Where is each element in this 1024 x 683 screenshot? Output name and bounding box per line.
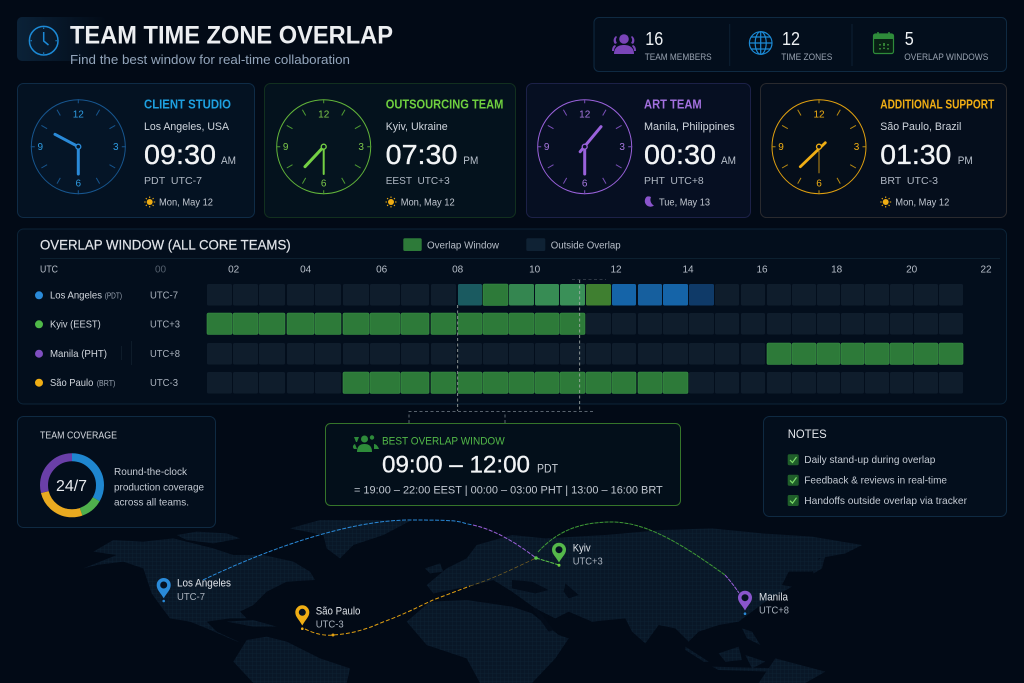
icon: clock: [29, 26, 58, 55]
route: Los Angeles arc: [203, 520, 536, 580]
time axis: 14: [682, 264, 694, 275]
panel: art team clock: PHT UTC+8: [644, 175, 704, 187]
panel: outsourcing team clock: PM: [463, 155, 478, 167]
best window heading: BEST OVERLAP WINDOW: [382, 435, 505, 447]
row label: Los Angeles: [35, 290, 178, 302]
donut chart: 24/7: [56, 478, 87, 495]
icon: moon: [645, 196, 654, 207]
row label: Los Angeles: Los Angeles: [50, 290, 102, 302]
row label: Manila: UTC+8: [150, 348, 180, 360]
panel: client studio clock: AM: [221, 155, 236, 167]
row label: Manila: Manila (PHT): [50, 348, 107, 360]
clock: Kyiv: 6: [321, 179, 327, 190]
note: reviews: Feedback & reviews in real-time: [804, 475, 947, 487]
panel: art team clock: AM: [721, 155, 736, 167]
header: [17, 17, 393, 67]
stat: team members: 16: [645, 29, 663, 49]
world map: [83, 520, 862, 683]
time axis: 06: [376, 264, 388, 275]
icon: sun: [386, 196, 396, 208]
clock: Los Angeles: 3: [113, 142, 119, 153]
subtitle: Find the best window for real-time collaboration: [70, 52, 350, 67]
panel: notes: [764, 416, 1006, 516]
legend: outside overlap: [526, 238, 621, 251]
coverage description: production coverage: [114, 481, 204, 493]
timeline row: Kyiv: [207, 313, 963, 334]
pin: São Paulo: [295, 605, 360, 631]
coverage heading: TEAM COVERAGE: [40, 430, 117, 441]
clock: Los Angeles: [31, 99, 126, 194]
panel: outsourcing team clock: 07:30: [386, 139, 457, 170]
clock: São Paulo: 3: [854, 142, 860, 153]
pin: Los Angeles: Los Angeles: [177, 578, 231, 590]
panel: outsourcing team clock: OUTSOURCING TEAM: [386, 98, 503, 112]
time axis: 16: [756, 264, 768, 275]
panel: art team clock: 00:30: [644, 139, 716, 170]
row label: São Paulo: UTC-3: [150, 377, 178, 389]
time axis: 00: [155, 264, 166, 275]
route: Kyiv to Manila arc: [534, 522, 739, 593]
icon: sun: [880, 196, 891, 208]
panel: art team clock: Tue, May 13: [659, 198, 710, 209]
time axis: 12: [610, 264, 622, 275]
clock: Manila: 6: [582, 179, 588, 190]
stat: time zones: TIME ZONES: [781, 52, 832, 63]
legend: overlap window: Overlap Window: [427, 240, 500, 251]
clock: Los Angeles: 9: [38, 142, 44, 153]
panel: additional support clock: PM: [958, 155, 973, 167]
panel: client studio clock: 09:30: [144, 139, 216, 170]
panel: outsourcing team clock: Kyiv, Ukraine: [386, 121, 448, 133]
pin: São Paulo: São Paulo: [316, 605, 360, 617]
row label: São Paulo: (BRT): [97, 379, 116, 388]
panel: overlap window chart: [18, 229, 1006, 404]
clock: Kyiv: 12: [318, 110, 330, 121]
pin: Los Angeles: UTC-7: [177, 591, 205, 603]
pin: Los Angeles: [157, 578, 231, 603]
stat: time zones: [749, 29, 832, 63]
stat: team members: [612, 29, 712, 63]
best window time: 09:00 – 12:00: [382, 452, 530, 479]
timeline row: São Paulo: [207, 372, 963, 394]
panel: summary stats: [594, 18, 1006, 72]
map: eastern hemisphere land: [512, 528, 862, 683]
panel: additional support clock: BRT UTC-3: [880, 175, 938, 187]
best window conversions: = 19:00 – 22:00 EEST | 00:00 – 03:00 PHT | 13:00 – 16:00 BRT: [354, 484, 663, 496]
row label: Kyiv: UTC+3: [150, 319, 180, 331]
note: stand-up: Daily stand-up during overlap: [804, 454, 935, 466]
clock: Manila: 3: [619, 142, 625, 153]
clock: São Paulo: 9: [778, 142, 784, 153]
pin: Manila: Manila: [759, 591, 789, 603]
time axis: 22: [980, 264, 992, 275]
panel: additional support clock: [760, 84, 1006, 218]
stat: overlap windows: 5: [905, 29, 914, 49]
title: TEAM TIME ZONE OVERLAP: [70, 21, 393, 49]
panel: best overlap window: PDT: [537, 462, 559, 476]
time axis: [40, 264, 992, 275]
coverage description: across all teams.: [114, 497, 189, 509]
coverage description: Round-the-clock: [114, 466, 188, 478]
pin: Kyiv: UTC+3: [573, 555, 603, 567]
pin: Manila: [738, 591, 789, 617]
route: São Paulo arc: [305, 558, 536, 636]
panel: client studio clock: [18, 84, 254, 218]
panel: additional support clock: Mon, May 12: [895, 198, 950, 209]
panel: additional support clock: São Paulo, Brazil: [880, 121, 961, 133]
timeline row: Manila: [207, 343, 963, 364]
panel: best overlap window: [326, 424, 680, 506]
chart heading: OVERLAP WINDOW (ALL CORE TEAMS): [40, 236, 291, 252]
legend: overlap window: [403, 238, 500, 251]
notes heading: NOTES: [788, 427, 827, 441]
timeline row: Los Angeles: [207, 284, 963, 306]
row label: Los Angeles: (PDT): [105, 292, 122, 301]
pin: Manila: UTC+8: [759, 605, 789, 617]
panel: client studio clock: Los Angeles, USA: [144, 121, 230, 133]
panel: team coverage: [18, 416, 216, 528]
time axis: UTC: [40, 264, 58, 275]
stat: overlap windows: OVERLAP WINDOWS: [904, 52, 988, 63]
panel: client studio clock: CLIENT STUDIO: [144, 98, 231, 112]
row label: São Paulo: São Paulo: [50, 377, 93, 389]
panel: outsourcing team clock: EEST UTC+3: [386, 175, 450, 187]
icon: team: [353, 435, 379, 452]
clock: São Paulo: 6: [816, 179, 822, 190]
panel: client studio clock: Mon, May 12: [159, 198, 213, 209]
time axis: 04: [300, 264, 312, 275]
legend: outside overlap: Outside Overlap: [551, 240, 621, 251]
stat: time zones: 12: [782, 29, 800, 49]
header glow: [17, 17, 107, 61]
panel: client studio clock: PDT UTC-7: [144, 175, 202, 187]
clock: São Paulo: 12: [813, 110, 825, 121]
icon: sun: [144, 196, 155, 208]
row label: Los Angeles: UTC-7: [150, 290, 178, 302]
map: western hemisphere land: [83, 520, 512, 683]
panel: additional support clock: ADDITIONAL SUPPORT: [880, 98, 995, 112]
time axis: 02: [228, 264, 240, 275]
clock: Manila: 12: [579, 110, 591, 121]
clock: Kyiv: 3: [358, 142, 364, 153]
row label: Manila: [35, 341, 180, 365]
pin: Kyiv: [552, 543, 603, 567]
overlap guide lines: [409, 280, 606, 423]
clock: Los Angeles: 12: [73, 110, 84, 121]
row label: São Paulo: [35, 377, 178, 389]
pin: Kyiv: Kyiv: [573, 543, 591, 555]
panel: art team clock: ART TEAM: [644, 98, 702, 112]
clock: São Paulo: [772, 99, 866, 194]
clock: Manila: [537, 99, 632, 194]
time axis: 10: [529, 264, 541, 275]
clock: Kyiv: 9: [283, 142, 289, 153]
row label: Kyiv: Kyiv (EEST): [50, 319, 101, 331]
panel: art team clock: [526, 84, 750, 218]
panel: outsourcing team clock: [264, 84, 516, 218]
row label: Kyiv: [35, 319, 180, 331]
time axis: 18: [831, 264, 843, 275]
panel: additional support clock: 01:30: [880, 139, 951, 170]
clock: Manila: 9: [544, 142, 550, 153]
panel: outsourcing team clock: Mon, May 12: [401, 198, 455, 209]
clock: Kyiv: [276, 99, 371, 194]
coverage description: [114, 466, 204, 509]
time axis: 20: [906, 264, 918, 275]
stat: team members: TEAM MEMBERS: [645, 52, 712, 63]
pin: São Paulo: UTC-3: [316, 619, 344, 631]
donut chart: [44, 457, 100, 513]
note: handoffs: Handoffs outside overlap via tracker: [804, 495, 967, 507]
clock: Los Angeles: 6: [76, 179, 82, 190]
panel: art team clock: Manila, Philippines: [644, 121, 735, 133]
time axis: 08: [452, 264, 464, 275]
stat: overlap windows: [874, 29, 988, 63]
